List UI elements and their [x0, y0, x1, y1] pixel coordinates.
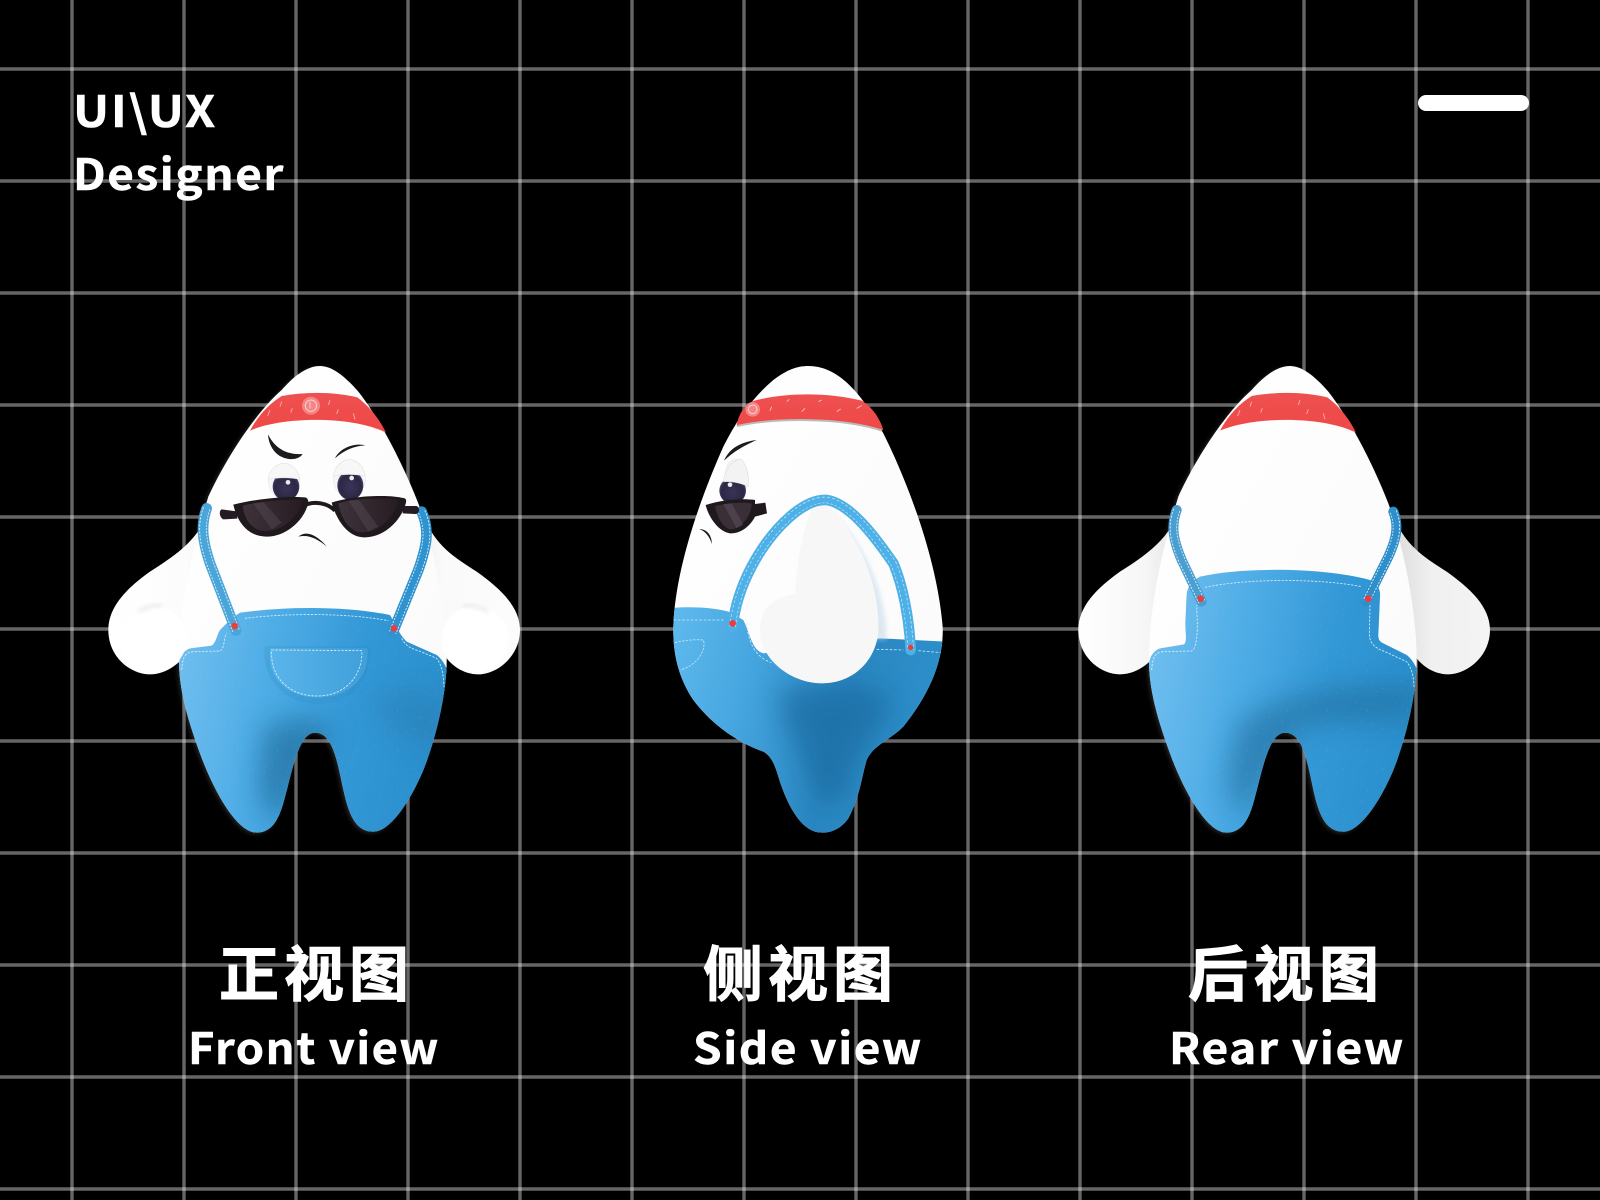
left strap: [203, 508, 236, 631]
left strap: [1173, 510, 1202, 602]
title: UI\UX Designer: UI\UX: [73, 78, 217, 140]
menu pill icon: [1418, 95, 1529, 111]
headband: [1220, 393, 1356, 433]
rear view label: 后视图: [1188, 927, 1379, 1014]
headband: [737, 394, 883, 431]
rear view label: [1169, 927, 1405, 1077]
right arm: [1393, 517, 1490, 674]
hands: [120, 606, 508, 672]
side view label: 侧视图: [703, 927, 893, 1014]
pocket: [264, 646, 370, 704]
body: [673, 366, 943, 833]
pocket: [675, 640, 704, 670]
leg glow: [1147, 367, 1415, 834]
mouth: [298, 534, 327, 547]
headband: [250, 393, 386, 433]
front view label: Front view: [188, 1015, 440, 1077]
eye: [719, 457, 750, 504]
sunglasses: [220, 496, 419, 537]
side view character: [667, 366, 950, 840]
strap buttons: [729, 620, 913, 650]
overalls: [673, 607, 942, 832]
left arm: [108, 520, 205, 674]
right arm: [423, 517, 520, 674]
overalls: [1149, 570, 1416, 833]
eyes: [268, 460, 365, 501]
right strap: [393, 512, 426, 633]
eyebrow: [724, 440, 757, 461]
body: [179, 366, 447, 833]
title: UI\UX Designer: Designer: [73, 141, 285, 203]
arm shadow: [807, 507, 887, 640]
side view label: Side view: [693, 1015, 923, 1077]
strap: [733, 500, 911, 650]
leg glow: [177, 367, 445, 834]
rear view character: [1078, 366, 1490, 840]
title: UI\UX Designer: [73, 78, 285, 203]
eyebrows: [268, 434, 365, 459]
left arm: [1078, 520, 1175, 674]
rear view label: Rear view: [1169, 1015, 1405, 1077]
overalls: [179, 608, 446, 833]
front view character: [108, 366, 520, 840]
body: [1149, 366, 1417, 833]
front view label: [188, 927, 440, 1077]
sunglasses: [706, 499, 767, 533]
front view label: 正视图: [219, 927, 409, 1014]
side view label: [693, 927, 923, 1077]
strap buttons: [1197, 595, 1372, 602]
arm: [760, 505, 878, 683]
right strap: [1366, 512, 1396, 602]
strap buttons: [231, 623, 397, 632]
mouth: [699, 529, 712, 544]
